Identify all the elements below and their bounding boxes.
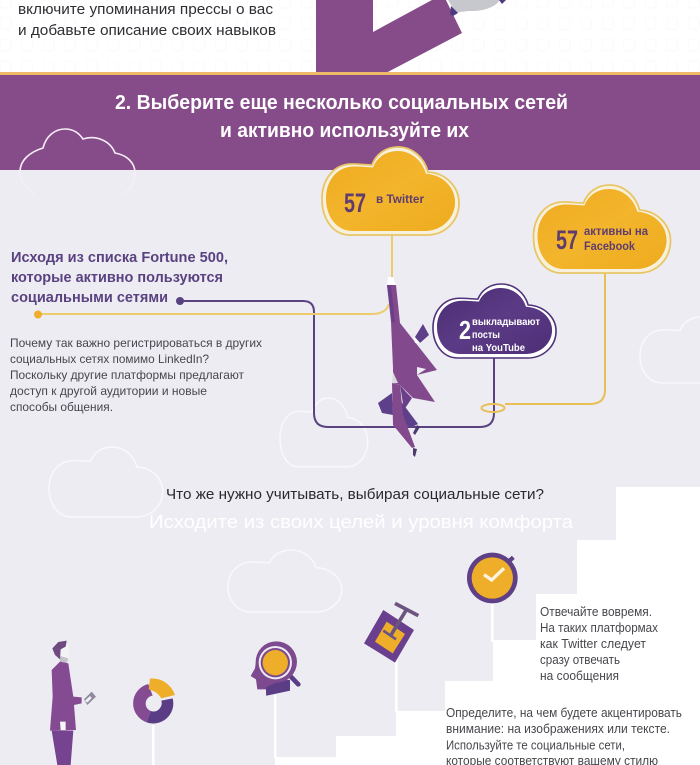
- text: respond on time: сразу отвечать: [540, 652, 620, 667]
- cloud: Twitter: в Twitter: [376, 192, 424, 206]
- icon: text T tool: [364, 603, 418, 663]
- top text block: и добавьте описание своих навыков: [18, 22, 276, 39]
- cloud: Facebook: 57: [556, 225, 578, 255]
- cloud: Twitter: 57: [344, 188, 366, 218]
- connector lines: [38, 234, 605, 427]
- icon: donut chart: [133, 679, 175, 723]
- icon: head with magnifier: [251, 641, 298, 696]
- cloud: YouTube: на YouTube: [472, 343, 525, 354]
- left heading: Исходя из списка Fortune 500,: [11, 249, 228, 266]
- section heading: [115, 92, 568, 142]
- text: define your focus: [446, 705, 682, 765]
- cloud: Facebook: [534, 185, 670, 273]
- left paragraph: социальных сетях помимо LinkedIn?: [10, 352, 209, 366]
- text: respond on time: на сообщения: [540, 668, 619, 683]
- section band: [0, 75, 700, 170]
- stems: [152, 600, 494, 765]
- section heading: 2. Выберите еще несколько социальных сетей: [115, 92, 568, 114]
- left paragraph: [10, 336, 262, 414]
- cloud: YouTube: выкладывают: [472, 317, 540, 328]
- text: respond on time: Отвечайте вовремя.: [540, 604, 652, 619]
- white subtitle: Исходите из своих целей и уровня комфорта: [149, 511, 574, 532]
- man standing with phone: [50, 641, 96, 765]
- section heading: и активно используйте их: [220, 120, 469, 142]
- text: define your focus: Используйте те социальные сети,: [446, 738, 625, 752]
- cloud: YouTube: [433, 284, 556, 358]
- top text block: [18, 1, 276, 39]
- cloud: Facebook: активны на: [584, 224, 648, 238]
- connector end dots: [34, 297, 184, 318]
- text: define your focus: Определите, на чем будете акцентировать: [446, 705, 682, 720]
- left paragraph: способы общения.: [10, 400, 113, 414]
- text: respond on time: На таких платформах: [540, 620, 658, 635]
- cloud: YouTube: 2: [459, 315, 471, 345]
- left heading: социальными сетями: [11, 289, 168, 306]
- top text block: включите упоминания прессы о вас: [18, 1, 274, 18]
- icon: stopwatch with check: [467, 553, 518, 603]
- left paragraph: Почему так важно регистрироваться в других: [10, 336, 262, 350]
- left heading: которые активно пользуются: [11, 269, 223, 286]
- orange divider line: [0, 72, 700, 75]
- left paragraph: доступ к другой аудитории и новые: [10, 384, 207, 398]
- cloud: Facebook: Facebook: [584, 239, 635, 253]
- text: respond on time: [540, 604, 658, 683]
- top white section with pattern: [0, 0, 700, 73]
- background clouds: [20, 129, 700, 612]
- hanging businessman figure: [378, 277, 437, 457]
- text: define your focus: внимание: на изображениях или тексте.: [446, 721, 670, 736]
- left heading: [11, 249, 228, 306]
- text: respond on time: как Twitter следует: [540, 636, 646, 651]
- cloud: YouTube: посты: [472, 330, 500, 341]
- question text: Что же нужно учитывать, выбирая социальные сети?: [166, 486, 544, 503]
- purple figure leg at top: [316, 0, 506, 74]
- stairs: [275, 487, 700, 765]
- left paragraph: Поскольку другие платформы предлагают: [10, 368, 244, 382]
- cloud: Twitter: [322, 147, 459, 235]
